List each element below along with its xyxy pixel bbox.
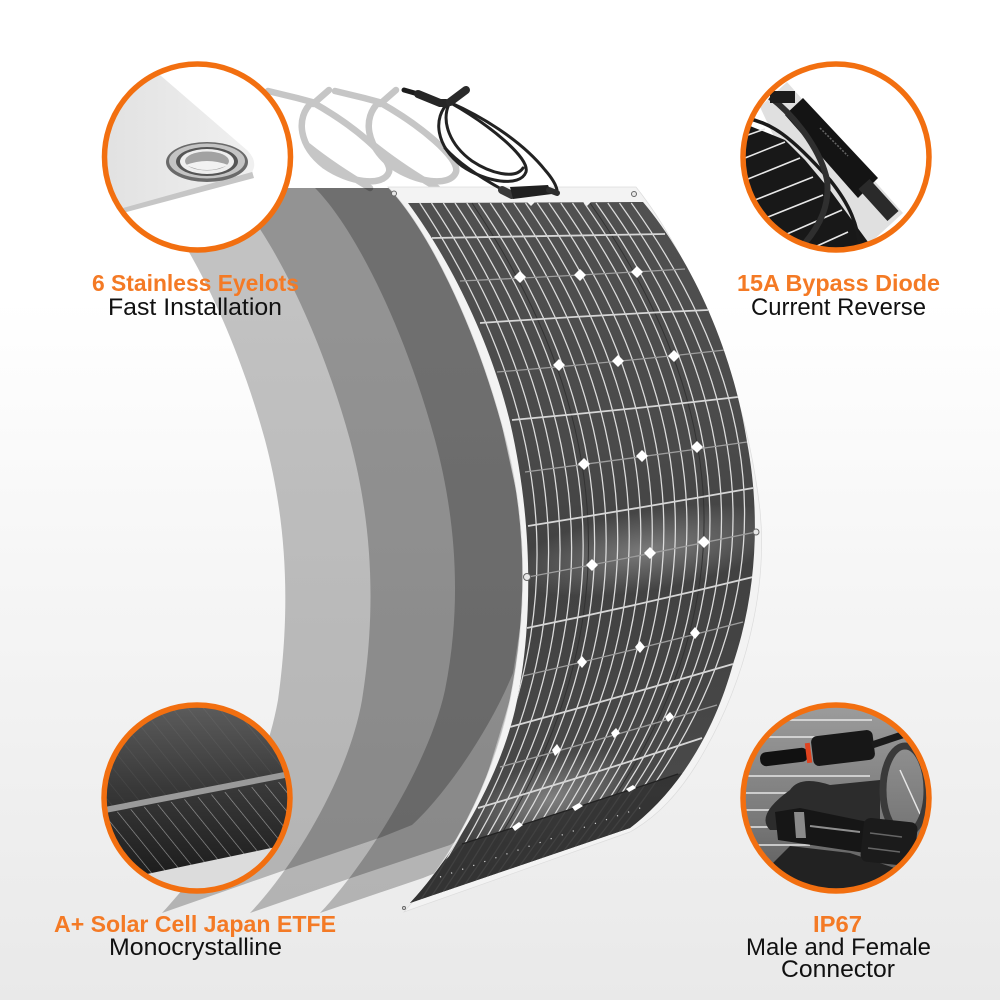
male plug: [404, 90, 418, 94]
white diamonds: [512, 266, 710, 831]
panel lines: [745, 720, 925, 845]
caption: eyelets: [92, 270, 299, 321]
detail circle: bypass diode: [735, 64, 929, 260]
lower plug highlight: [794, 812, 806, 838]
orange ring: [743, 64, 929, 250]
caption subtext line one: Male and Female: [746, 934, 931, 961]
lower finger lines: [110, 782, 287, 874]
orange ring: [104, 64, 290, 250]
lower plug shine: [810, 826, 860, 832]
female plug: [450, 90, 466, 102]
eyelets on panel: [392, 191, 759, 910]
lower plug body: [775, 808, 868, 853]
solar cells: [408, 202, 755, 903]
plate top: [107, 75, 254, 208]
upper plug tip: [759, 747, 809, 767]
frame band: [760, 82, 903, 243]
panel notches: [526, 201, 592, 206]
junction box: [510, 185, 552, 199]
caption heading: IP67: [813, 911, 862, 937]
orange ring: [743, 705, 929, 891]
caption subtext: Monocrystalline: [109, 934, 282, 961]
thin cable: [745, 118, 860, 250]
ghost panel near: [315, 188, 540, 913]
caption heading: 15A Bypass Diode: [737, 270, 940, 296]
orange ring: [104, 705, 290, 891]
white dot row: [440, 807, 643, 877]
plain cell rows: [432, 234, 753, 808]
diode box: [785, 98, 878, 198]
thick cable: [770, 97, 828, 243]
cell grid verticals: [420, 203, 745, 899]
plate side: [123, 172, 254, 212]
silver busbar: [100, 773, 295, 811]
solar panel: [388, 187, 795, 915]
circle fill: [743, 64, 929, 250]
ghost panel positions: [143, 188, 540, 913]
caption subtext: Fast Installation: [108, 294, 282, 321]
detail circle: eyelet: [90, 60, 290, 250]
plug body: [418, 94, 446, 103]
caption subtext line two: Connector: [781, 956, 895, 983]
dark shadow: [766, 780, 880, 830]
upper connector: [770, 91, 795, 103]
ghost panel middle: [228, 188, 540, 913]
upper cable: [872, 734, 905, 745]
detail circle: solar cell: [100, 705, 300, 900]
lower connector: [864, 184, 893, 216]
caption subtext: Current Reverse: [751, 294, 926, 321]
right gland: [549, 190, 557, 193]
cell lines: [745, 129, 848, 246]
caption: solar cell: [54, 911, 336, 961]
circle fill: [104, 64, 290, 250]
caption heading: 6 Stainless Eyelots: [92, 270, 299, 296]
cable loops: [439, 102, 557, 190]
lower nut: [860, 817, 918, 867]
diamond cell rows: [460, 269, 756, 844]
ghost panel far: [143, 188, 540, 913]
box label: [820, 128, 848, 156]
cell area: [746, 126, 868, 248]
circle fill: [743, 705, 929, 891]
caption: bypass diode: [737, 270, 940, 321]
grommet: [166, 142, 248, 182]
upper finger lines: [107, 708, 282, 806]
upper plug body: [810, 729, 876, 767]
red ring: [805, 743, 812, 763]
bottom dark strip: [410, 773, 682, 903]
panel frame: [388, 187, 762, 912]
nut ridges: [868, 833, 902, 852]
ghost cables behind panel: [268, 90, 456, 188]
silver edge: [148, 848, 272, 888]
cable loop: [883, 746, 927, 834]
cable with connectors and junction box: [404, 90, 557, 199]
circle fill: [104, 705, 290, 891]
dark lower panel: [773, 846, 894, 888]
module gaps: [470, 203, 704, 882]
detail circle: connectors: [743, 705, 930, 900]
caption heading: A+ Solar Cell Japan ETFE: [54, 911, 336, 937]
caption: connectors: [746, 911, 931, 983]
left gland: [502, 190, 512, 195]
